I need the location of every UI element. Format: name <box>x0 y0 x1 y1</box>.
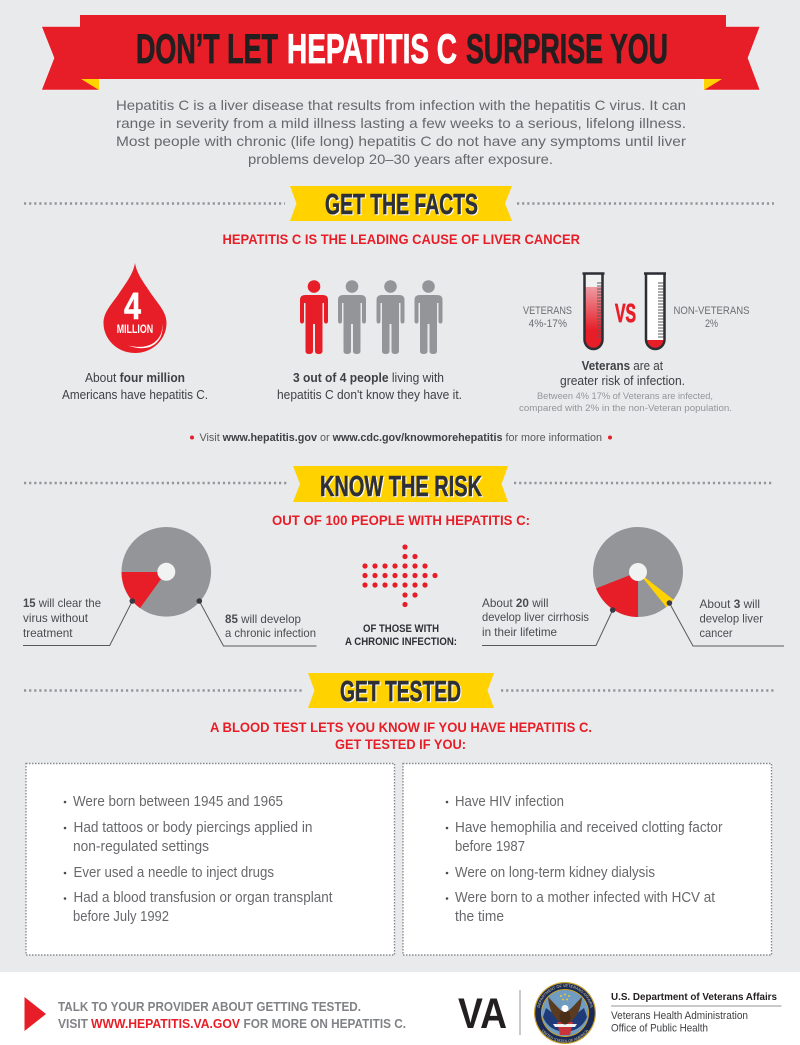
subheading: blood test <box>210 719 592 752</box>
logo: VA: VA <box>458 990 507 1038</box>
label: vs: VS <box>615 298 636 328</box>
stat text: Americans have hepatitis C. <box>62 388 208 402</box>
department name: U.S. Department of Veterans Affairs <box>611 991 777 1003</box>
title banner <box>42 15 760 90</box>
subheading: blood test: A BLOOD TEST LETS YOU KNOW IF YOU HAVE HEPATITIS C. <box>210 719 592 735</box>
call to action: FOR MORE ON HEPATITIS C. <box>244 1016 406 1031</box>
footer <box>0 972 800 1045</box>
label: non-veterans: NON-VETERANS <box>674 305 750 317</box>
call to action <box>58 999 406 1031</box>
section heading: know the risk <box>293 466 508 504</box>
call to action: WWW.HEPATITIS.VA.GOV <box>91 1016 240 1031</box>
stat text: About four million <box>85 371 185 385</box>
stat text <box>519 359 732 414</box>
callout: 85 will develop: 85 will develop <box>225 612 301 626</box>
department name: Office of Public Health <box>611 1023 708 1035</box>
panel: risk list left: non-regulated settings <box>73 839 209 855</box>
intro paragraph: Most people with chronic (life long) hepatitis C do not have any symptoms until liver <box>116 133 686 149</box>
call to action: TALK TO YOUR PROVIDER ABOUT GETTING TESTED. <box>58 999 361 1014</box>
intro paragraph: Hepatitis C is a liver disease that results from infection with the hepatitis C virus. It can <box>116 97 686 113</box>
panel: risk list right: Have hemophilia and received clotting factor <box>455 820 723 836</box>
callout: 85 will develop: a chronic infection <box>225 626 316 640</box>
callout: 15 will clear: 15 will clear the <box>23 596 101 610</box>
pie chart: 15 clear, 85 chronic <box>121 527 211 617</box>
panel: risk list left <box>26 764 394 955</box>
panel: risk list left: Were born between 1945 and 1965 <box>73 794 283 810</box>
visit links line: Visit www.hepatitis.gov or www.cdc.gov/knowmorehepatitis for more information <box>200 432 602 444</box>
arrow of dots <box>362 544 438 607</box>
panel: risk list right: Were born to a mother infected with HCV at <box>455 890 715 906</box>
panel: risk list left: Had a blood transfusion or organ transplant <box>74 890 332 906</box>
section heading: get tested: GET TESTED <box>341 677 462 709</box>
section heading: get the facts: GET THE FACTS <box>325 189 478 221</box>
section heading: know the risk: KNOW THE RISK <box>321 472 483 504</box>
label: of those with a chronic infection <box>345 623 457 648</box>
callout: 15 will clear: treatment <box>23 626 73 640</box>
callout: about 20: in their lifetime <box>482 625 557 639</box>
label: non-veterans <box>674 305 750 330</box>
stat text: 3 out of 4 people living with <box>293 371 444 385</box>
title <box>136 25 668 72</box>
intro paragraph <box>116 97 686 167</box>
intro paragraph: problems develop 20–30 years after exposure. <box>248 151 553 167</box>
section heading: get the facts <box>290 186 512 222</box>
panel: risk list right: Were on long-term kidney dialysis <box>455 865 655 881</box>
logo: VA seal: DEPARTMENT OF VETERANS AFFAIRS <box>537 984 593 1008</box>
callout: about 3: develop liver <box>700 612 763 626</box>
section heading: get tested: GET TESTED <box>340 676 461 708</box>
icon: red arrow <box>24 997 46 1031</box>
panel: risk list right: the time <box>455 909 504 925</box>
icon: non-veterans test tube <box>644 274 666 350</box>
section heading: get tested <box>308 673 494 709</box>
label: veterans <box>523 305 572 330</box>
section heading: know the risk: KNOW THE RISK <box>320 471 482 503</box>
label: of those with a chronic infection: A CHRONIC INFECTION: <box>345 636 457 648</box>
pie chart: cirrhosis and liver cancer <box>593 527 683 617</box>
stat: four million <box>62 263 208 402</box>
icon: blood drop <box>104 263 166 353</box>
stat text <box>277 371 462 402</box>
panel: risk list right: before 1987 <box>455 839 525 855</box>
subheading: blood test: GET TESTED IF YOU: <box>335 736 466 752</box>
icon: blood drop: MILLION <box>117 324 153 336</box>
icon: veterans test tube <box>582 274 604 349</box>
callout: about 3 <box>667 597 784 646</box>
callout: about 3: cancer <box>700 626 732 640</box>
callout: 85 will develop <box>196 598 316 646</box>
department name: Veterans Health Administration <box>611 1010 748 1022</box>
label: of those with a chronic infection: OF THOSE WITH <box>363 623 439 635</box>
section heading: get the facts: GET THE FACTS <box>326 190 479 222</box>
subheading: leading cause: HEPATITIS C IS THE LEADING CAUSE OF LIVER CANCER <box>222 231 580 247</box>
callout: about 20 <box>482 596 616 646</box>
logo: VA seal <box>534 982 596 1044</box>
stat: three out of four <box>277 280 462 402</box>
stat text: hepatitis C don't know they have it. <box>277 388 462 402</box>
stat text: Between 4% 17% of Veterans are infected, <box>537 391 713 402</box>
label: veterans: VETERANS <box>523 305 572 317</box>
stat text: compared with 2% in the non-Veteran population. <box>519 403 732 414</box>
panel: risk list left: Ever used a needle to inject drugs <box>74 865 274 881</box>
stat text <box>62 371 208 402</box>
panel: risk list right: Have HIV infection <box>455 794 564 810</box>
label: veterans: 4%-17% <box>529 318 567 330</box>
panel: risk list left: before July 1992 <box>73 909 169 925</box>
callout: 15 will clear: virus without <box>23 611 89 625</box>
callout: about 20: About 20 will <box>482 596 548 610</box>
logo: VA seal: UNITED STATES OF AMERICA <box>542 1029 588 1042</box>
department name <box>611 991 782 1035</box>
icon: blood drop: 4 <box>124 286 141 328</box>
label: non-veterans: 2% <box>705 318 718 330</box>
title: HEPATITIS C <box>287 25 457 72</box>
panel: risk list left: Had tattoos or body piercings applied in <box>74 820 312 836</box>
title: SURPRISE YOU <box>466 25 668 72</box>
intro paragraph: range in severity from a mild illness lasting a few weeks to a serious, lifelong illness. <box>116 115 686 131</box>
stat text: Veterans are at <box>582 359 663 373</box>
stat text: greater risk of infection. <box>560 374 685 388</box>
icon: four people <box>300 280 442 354</box>
call to action: VISIT <box>58 1016 88 1031</box>
title: DON’T LET <box>136 25 278 72</box>
subheading: out of 100: OUT OF 100 PEOPLE WITH HEPATITIS C: <box>272 512 530 528</box>
callout: about 20: develop liver cirrhosis <box>482 610 589 624</box>
callout: about 3: About 3 will <box>700 597 760 611</box>
stat: veterans vs non-veterans <box>519 274 750 414</box>
panel: risk list right <box>403 764 772 955</box>
callout: 15 will clear <box>23 596 135 646</box>
